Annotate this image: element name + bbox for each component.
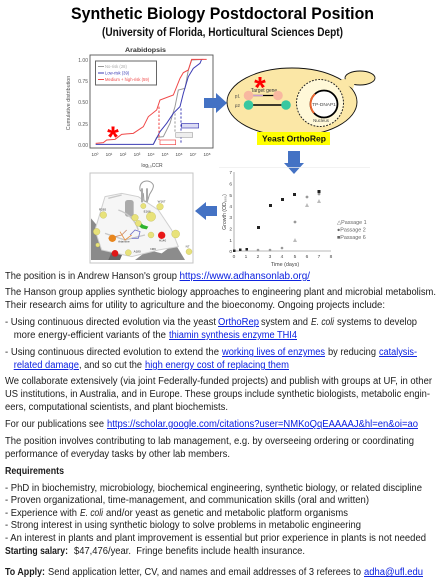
- chart: growth scatter plot: 8: [330, 254, 333, 260]
- text: to apply: To Apply:: [5, 567, 45, 578]
- text: publications: https://scholar.google.com/citations?user=NMKoQqEAAAAJ&hl=en&oi=ao: [107, 419, 419, 430]
- chart: Arabidopsis cumulative distribution: log₁₀CCR: [141, 163, 163, 169]
- label: Yeast OrthoRep: [257, 132, 330, 145]
- scatter legend: [337, 220, 367, 241]
- chart: Arabidopsis cumulative distribution: 0.25: [78, 122, 88, 128]
- list: requirements: - Strong interest in using synthetic biology to solve problems in metabolic engineering: [5, 520, 361, 531]
- chart: growth scatter plot: 7: [318, 254, 321, 260]
- list: requirements: [5, 483, 426, 544]
- image: protein structure: N69: [150, 247, 156, 251]
- arrow: right: [204, 93, 227, 113]
- chart: growth scatter plot: 3: [229, 215, 232, 221]
- legend: Low-risk (39): [105, 70, 130, 76]
- list: requirements: and/or yeast as genetic and metabolic platform organisms: [106, 508, 348, 519]
- chart: Arabidopsis cumulative distribution: 10⁷: [190, 152, 197, 157]
- chart: growth scatter plot: 5: [229, 193, 232, 199]
- text: project 2: high energy cost of replacing them: [145, 360, 289, 371]
- text: project 2: [5, 347, 417, 371]
- chart: growth scatter plot: 4: [229, 204, 232, 210]
- image: protein structure: H140: [159, 239, 166, 243]
- chart: growth scatter plot: 1: [229, 238, 232, 244]
- chart: growth scatter plot: Time (days): [271, 262, 299, 268]
- chart: Arabidopsis cumulative distribution: Cumulative distribution: [66, 76, 72, 130]
- icon: red asterisk: *: [254, 72, 266, 104]
- text: project 2: related damage: [14, 360, 80, 371]
- image: protein structure: E166: [144, 210, 151, 214]
- text: project 1: - Using continuous directed evolution via the yeast: [5, 317, 216, 328]
- scatter legend: ●Passage 2: [337, 228, 366, 234]
- text: starting salary: $47,476/year. Fringe benefits include health insurance.: [74, 546, 305, 557]
- diagram: yeast cell: [227, 68, 375, 145]
- text: collaborations: [5, 376, 433, 413]
- text: to apply: Send application letter, CV, and names and email addresses of 3 referees to: [48, 567, 362, 578]
- nucleus: [296, 80, 344, 126]
- chart: Arabidopsis cumulative distribution: 10²: [120, 152, 127, 157]
- arrow: left: [195, 202, 217, 220]
- nucleus: TP-DNAP1: [312, 102, 336, 108]
- plasmid p1: [235, 88, 283, 100]
- chart: growth scatter plot: Growth (OD₆₀₀): [222, 194, 228, 230]
- plasmid p1: Target gene: [251, 88, 277, 94]
- text: lab management: performance of everyday tasks by other lab members.: [5, 449, 230, 460]
- icon: red asterisk: *: [107, 121, 119, 154]
- text: project 2: catalysis-: [379, 347, 417, 358]
- text: collaborations: US institutions, in Australia, and in Europe. These groups include synthetic biologists, metabolic engin-: [5, 389, 430, 400]
- chart: Arabidopsis cumulative distribution: 10⁴: [147, 152, 155, 157]
- chart: growth scatter plot: 3: [269, 254, 272, 260]
- list: requirements: E. coli: [80, 508, 104, 519]
- chart: Arabidopsis cumulative distribution: 0.50: [78, 100, 88, 106]
- text: project 2: working lives of enzymes: [221, 347, 325, 358]
- text: project 2: by reducing: [328, 347, 376, 358]
- chart: growth scatter plot: 5: [294, 254, 297, 260]
- image: protein structure: A180: [134, 250, 141, 254]
- chart: Arabidopsis cumulative distribution: 10⁶: [175, 152, 183, 157]
- label: Yeast OrthoRep: Yeast OrthoRep: [262, 134, 326, 144]
- text: group description: The Hanson group applies synthetic biology approaches to engineering plant and microbial metabolism.: [5, 287, 436, 298]
- image: protein structure: thiamine: [118, 240, 130, 244]
- list: requirements: - Proven organizational, time-management, and communication skills (oral and written): [5, 495, 369, 506]
- text: publications: For our publications see: [5, 419, 105, 430]
- text: starting salary: Starting salary:: [5, 546, 68, 557]
- legend: [96, 61, 156, 85]
- text: project 1: systems to develop: [337, 317, 418, 328]
- arrow: down: [284, 151, 304, 174]
- text: position intro: https://www.adhansonlab.org/: [180, 271, 310, 282]
- image: protein structure: N7: [186, 244, 190, 248]
- text: position intro: The position is in Andrew Hanson's group: [5, 271, 178, 282]
- plasmid p2: p2: [235, 103, 240, 108]
- text: group description: Their research aims for utility to agriculture and the bioeconomy. Ongoing projects include:: [5, 300, 385, 311]
- text: group description: [5, 287, 436, 311]
- legend: No-risk (28): [105, 64, 127, 69]
- text: position intro: [5, 271, 310, 282]
- text: project 2: - Using continuous directed evolution to extend the: [5, 347, 220, 358]
- image: protein structure: [90, 173, 193, 263]
- text: project 1: thiamin synthesis enzyme THI4: [169, 330, 298, 341]
- chart: growth scatter plot: 0: [229, 249, 232, 255]
- text: project 1: more energy-efficient variants of the: [14, 330, 167, 341]
- plasmid p1: p1: [235, 94, 240, 98]
- list: requirements: - An interest in plants and plant improvement is essential but prior experience in plants is not needed: [5, 533, 426, 544]
- chart: Arabidopsis cumulative distribution: 10⁸: [203, 152, 211, 157]
- chart: growth scatter plot: 2: [229, 226, 232, 232]
- chart: Arabidopsis cumulative distribution: 10⁰: [92, 152, 99, 157]
- text: project 1: OrthoRep: [218, 317, 260, 328]
- text: project 1: [5, 317, 418, 341]
- chart: Arabidopsis cumulative distribution: 0.00: [78, 143, 88, 149]
- text: project 1: E. coli: [311, 317, 335, 328]
- chart: Arabidopsis cumulative distribution: 10¹: [106, 152, 113, 157]
- image: protein structure: R265: [99, 208, 106, 212]
- heading: requirements: Requirements: [5, 466, 64, 477]
- chart: growth scatter plot: [219, 168, 370, 268]
- legend: Medium + high-risk (59): [105, 77, 150, 82]
- list: requirements: - PhD in biochemistry, microbiology, biochemical engineering, synthetic biology, or related discipline: [5, 483, 423, 494]
- chart: Arabidopsis cumulative distribution: 1.00: [78, 58, 88, 64]
- chart: Arabidopsis cumulative distribution: 10³: [134, 152, 141, 157]
- chart: growth scatter plot: 0: [233, 254, 236, 260]
- chart: Arabidopsis cumulative distribution: [66, 47, 213, 169]
- chart: growth scatter plot: 7: [229, 170, 232, 176]
- subtitle: (University of Florida, Horticultural Sciences Dept): [102, 27, 343, 39]
- text: collaborations: We collaborate extensively (via joint Federally-funded projects) and publish with groups at UF, in other: [5, 376, 433, 387]
- text: project 1: system and: [261, 317, 308, 328]
- chart: Arabidopsis cumulative distribution: 0.75: [78, 79, 88, 85]
- plasmid p2: [235, 100, 291, 110]
- chart: growth scatter plot: 2: [257, 254, 260, 260]
- image: protein structure: W167: [158, 200, 166, 204]
- chart: growth scatter plot: 6: [306, 254, 309, 260]
- scatter legend: ■Passage 6: [337, 235, 366, 241]
- chart: growth scatter plot: 6: [229, 182, 232, 188]
- text: lab management: The position involves contributing to lab management, e.g. by overseeing ordering or coordinating: [5, 436, 414, 447]
- list: requirements: - Experience with: [5, 508, 77, 519]
- nucleus: Nucleus: [313, 118, 330, 123]
- text: lab management: [5, 436, 414, 460]
- text: collaborations: eers, computational scientists, and plant biochemists.: [5, 402, 228, 413]
- text: to apply: adha@ufl.edu: [364, 567, 423, 578]
- chart: growth scatter plot: 1: [245, 254, 248, 260]
- text: project 2: , and so cut the: [79, 360, 143, 371]
- chart: Arabidopsis cumulative distribution: Arabidopsis: [125, 47, 167, 54]
- scatter legend: △Passage 1: [337, 220, 367, 226]
- title: Synthetic Biology Postdoctoral Position: [71, 4, 374, 23]
- chart: Arabidopsis cumulative distribution: 10⁵: [161, 152, 169, 157]
- chart: growth scatter plot: 4: [281, 254, 284, 260]
